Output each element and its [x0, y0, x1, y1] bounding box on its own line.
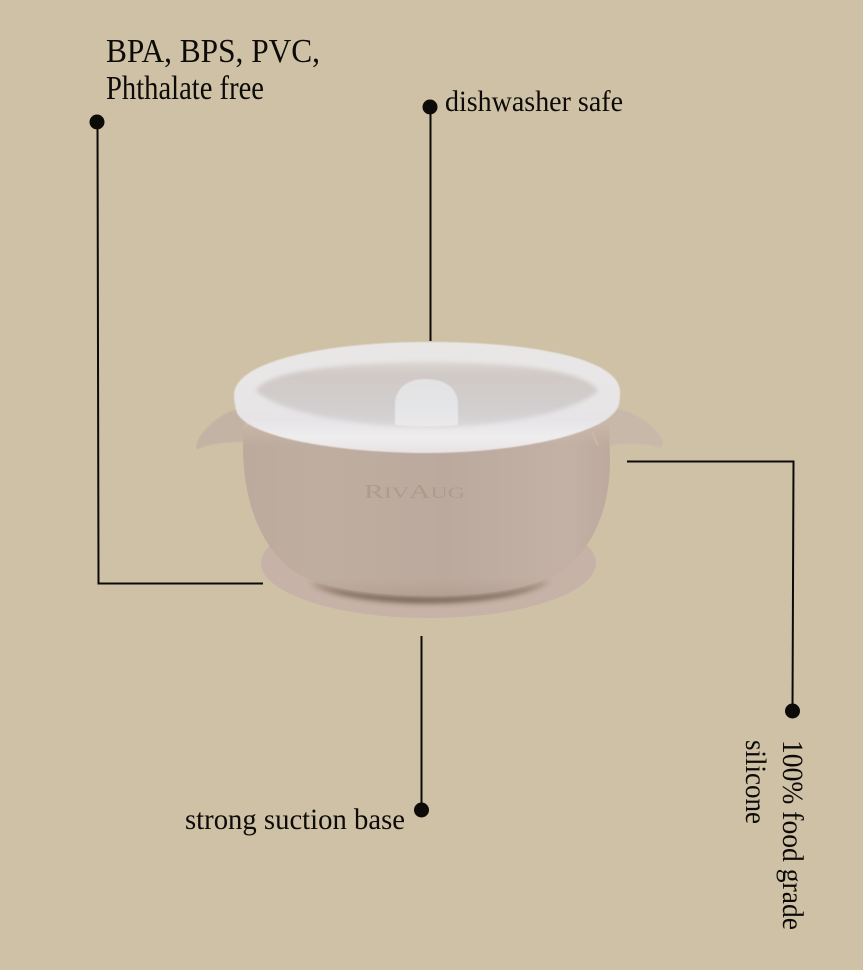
callout: strong suction base: [185, 636, 429, 836]
callout: food grade silicone: [627, 462, 809, 930]
callout: BPA free: [90, 33, 320, 584]
label line two: silicone: [739, 740, 772, 824]
leader line: [98, 122, 263, 584]
dot: [422, 100, 438, 114]
product: bowl with lid: [196, 342, 663, 618]
suction base: [261, 508, 596, 618]
lid rim: [234, 342, 620, 453]
label: strong suction base: [185, 803, 405, 836]
leader line: [430, 107, 432, 341]
dot: [90, 114, 104, 130]
callout: dishwasher safe: [422, 85, 623, 341]
left handle: [196, 410, 246, 450]
leader line: [420, 636, 422, 810]
leader line: [627, 462, 794, 711]
dot: [785, 704, 800, 718]
right handle: [600, 409, 663, 448]
lid inner window: [256, 362, 598, 427]
bowl body: [243, 425, 610, 595]
label: Phthalate free: [106, 70, 264, 107]
label: dishwasher safe: [445, 85, 623, 118]
lid knob: [395, 379, 458, 426]
label: 100% food grade: [776, 740, 809, 930]
embossed brand: R IV A UG: [364, 481, 466, 503]
dot: [414, 802, 429, 818]
bowl notch: [592, 432, 598, 446]
label: BPA, BPS, PVC,: [106, 33, 320, 70]
